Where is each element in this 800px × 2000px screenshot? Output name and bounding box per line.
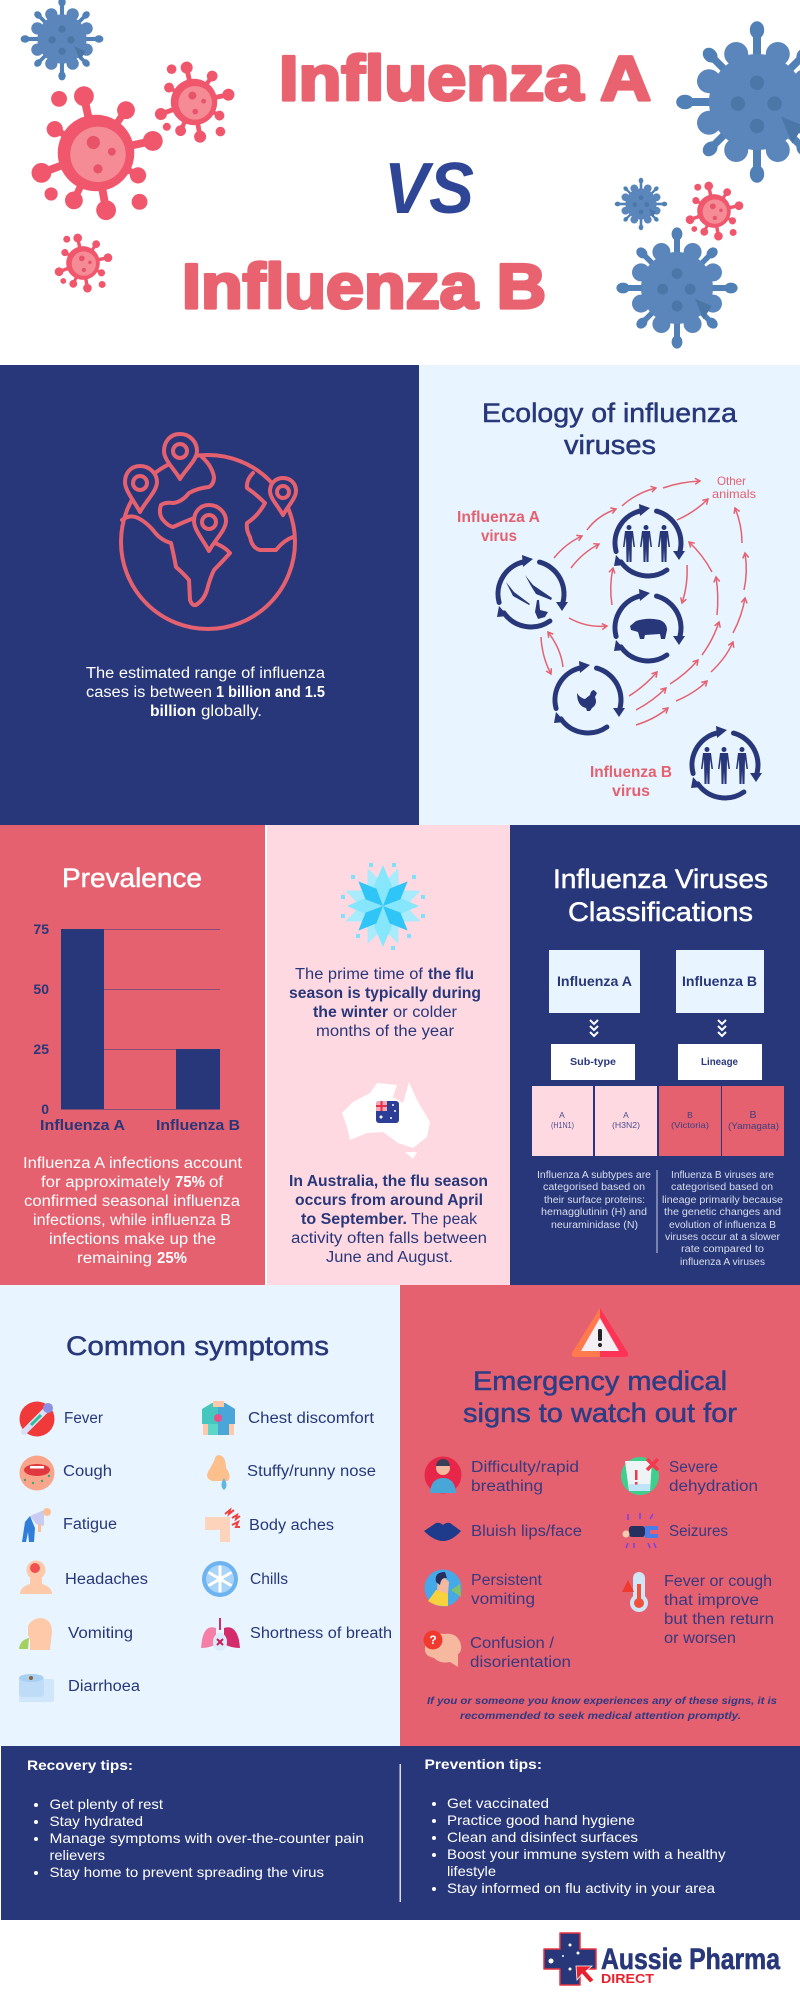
- heading: emergency: Emergency medical: [473, 1366, 727, 1396]
- sign: confusion: [424, 1630, 571, 1671]
- symptom: chest discomfort: Chest discomfort: [248, 1410, 375, 1427]
- icon: chicken cycle: [554, 661, 625, 733]
- cell: B Victoria: B: [687, 1110, 693, 1120]
- bar chart: 50: [33, 981, 49, 997]
- virus: small red right: [684, 181, 744, 241]
- text: prevention tips: Practice good hand hygiene: [447, 1812, 635, 1828]
- text: australia season: [289, 1173, 488, 1266]
- bar chart: 75: [33, 921, 49, 937]
- text: influenza B lineage: evolution of influenza B: [669, 1220, 776, 1231]
- label: influenza A virus: Influenza A: [457, 509, 540, 526]
- header: [0, 0, 800, 365]
- text: prevention tips: Prevention tips:: [424, 1756, 542, 1772]
- text: influenza B lineage: influenza A viruses: [680, 1257, 765, 1268]
- icon: snowflake: [341, 863, 425, 950]
- text: australia season: In Australia, the flu season: [289, 1173, 488, 1190]
- symptom: fever: [20, 1402, 103, 1436]
- logo: Aussie Pharma Direct: DIRECT: [601, 1971, 654, 1986]
- symptom: fatigue: Fatigue: [63, 1516, 117, 1533]
- heading: ecology: [482, 398, 738, 460]
- virus: red top: [153, 60, 236, 144]
- cell: A H3N2: [595, 1086, 657, 1156]
- virus: large blue right: [676, 21, 800, 183]
- symptom: fever: Fever: [64, 1410, 103, 1427]
- symptom: diarrhoea: Diarrhoea: [68, 1678, 140, 1695]
- label: influenza B virus: Influenza B: [590, 764, 672, 781]
- cell: B Yamagata: (Yamagata): [728, 1121, 779, 1131]
- text: influenza B lineage: viruses occur at a slower: [665, 1232, 781, 1243]
- arrows: transmission paths: [541, 481, 746, 725]
- text: prevention tips: Stay informed on flu activity in your area: [447, 1880, 715, 1896]
- panel: tips: [1, 1746, 800, 1920]
- sign: confusion: ?: [429, 1633, 437, 1647]
- label: influenza B virus: [590, 764, 672, 800]
- text: prevention tips: lifestyle: [447, 1863, 496, 1879]
- heading: emergency: [463, 1366, 737, 1428]
- symptom: fatigue: [22, 1508, 117, 1542]
- text: influenza B lineage: the genetic changes and: [664, 1207, 781, 1218]
- text: estimated range: cases is between: [86, 684, 212, 701]
- text: prevalence description: for approximately: [41, 1174, 170, 1191]
- title: Influenza B: Influenza B: [182, 252, 546, 322]
- heading: common symptoms: Common symptoms: [66, 1331, 329, 1361]
- text: prime time: [289, 966, 481, 1040]
- box: influenza B: [676, 950, 764, 1013]
- symptom: headaches: Headaches: [65, 1571, 148, 1588]
- sign: difficulty breathing: [424, 1456, 579, 1495]
- logo: Aussie Pharma Direct: [544, 1933, 780, 1986]
- sign: returning fever: [622, 1572, 774, 1647]
- text: influenza B lineage: categorised based on: [671, 1182, 773, 1193]
- text: seek medical attention: If you or someone you know experiences any of these signs, it is: [427, 1695, 777, 1707]
- sign: confusion: Confusion /: [470, 1635, 555, 1652]
- symptom: cough: Cough: [63, 1463, 112, 1480]
- sign: returning fever: that improve: [664, 1592, 759, 1609]
- text: estimated range: [86, 665, 325, 720]
- text: prime time: the flu: [428, 966, 474, 983]
- sign: returning fever: but then return: [664, 1611, 774, 1628]
- panel: classifications: [510, 825, 800, 1285]
- sign: seizures: Seizures: [669, 1523, 728, 1540]
- cell: A H3N2: (H3N2): [612, 1120, 640, 1130]
- panel: flu season: [267, 825, 510, 1285]
- text: australia season: June and August.: [326, 1249, 453, 1266]
- panel: emergency signs: [400, 1285, 800, 1746]
- sign: difficulty breathing: breathing: [471, 1478, 543, 1495]
- text: seek medical attention: [427, 1695, 777, 1722]
- bar chart: Influenza B: [156, 1118, 240, 1134]
- symptom: stuffy nose: [207, 1455, 376, 1490]
- text: recovery tips: Recovery tips:: [27, 1757, 133, 1773]
- text: prevalence description: Influenza A infections account: [23, 1155, 243, 1172]
- sign: confusion: disorientation: [470, 1654, 571, 1671]
- text: prime time: or colder: [393, 1004, 457, 1021]
- icon: humans cycle: [614, 504, 685, 576]
- heading: prevalence: Prevalence: [62, 863, 202, 893]
- virus: blue top left: [21, 0, 103, 80]
- text: prevention tips: Boost your immune system with a healthy: [447, 1846, 726, 1862]
- text: prevalence description: 75%: [175, 1174, 205, 1191]
- bar chart: 25: [33, 1041, 49, 1057]
- text: prevalence description: 25%: [157, 1250, 187, 1267]
- virus: red lower left: [53, 233, 113, 293]
- text: estimated range: globally.: [201, 703, 262, 720]
- text: estimated range: billion: [150, 703, 196, 720]
- icon: australia map with flag: [342, 1082, 430, 1159]
- panel: common symptoms: [0, 1285, 400, 1746]
- heading: classifications: [553, 864, 768, 927]
- icon: chevrons A: [590, 1020, 598, 1036]
- text: influenza A subtypes: neuraminidase (N): [551, 1220, 638, 1231]
- symptom: chills: [202, 1561, 288, 1597]
- label: other animals: [712, 474, 756, 501]
- icon: warning triangle: [572, 1308, 628, 1357]
- text: australia season: occurs from around April: [295, 1192, 483, 1209]
- text: influenza A subtypes: hemagglutinin (H) and: [541, 1207, 647, 1218]
- panel: prevalence: [0, 825, 265, 1285]
- symptom: diarrhoea: [19, 1674, 140, 1702]
- symptom: chills: Chills: [250, 1571, 288, 1588]
- text: prime time: The prime time of: [295, 966, 424, 983]
- text: australia season: activity often falls between: [291, 1230, 487, 1247]
- symptom: shortness of breath: [201, 1618, 392, 1651]
- sign: persistent vomiting: vomiting: [471, 1591, 535, 1608]
- panel: ecology of influenza viruses: [419, 365, 800, 825]
- heading: classifications: Classifications: [568, 897, 753, 927]
- text: influenza A subtypes: [537, 1170, 651, 1231]
- symptom: stuffy nose: Stuffy/runny nose: [247, 1463, 376, 1480]
- sign: severe dehydration: [621, 1457, 758, 1495]
- icon: influenza B humans cycle: [691, 726, 762, 798]
- bar: influenza A: [61, 929, 104, 1109]
- virus: small blue: [615, 178, 667, 230]
- label: other animals: Other: [717, 474, 746, 488]
- icon: birds cycle: [497, 555, 568, 627]
- box: influenza A: [549, 950, 640, 1013]
- sign: severe dehydration: Severe: [669, 1459, 718, 1476]
- text: prime time: season is typically during: [289, 985, 481, 1002]
- text: seek medical attention: recommended to seek medical attention promptly.: [460, 1710, 741, 1722]
- text: influenza A subtypes: their surface proteins:: [544, 1195, 645, 1206]
- heading: ecology: Ecology of influenza: [482, 398, 738, 428]
- text: recovery tips: Stay hydrated: [50, 1813, 143, 1829]
- box: sub-type: [551, 1044, 635, 1080]
- text: prime time: months of the year: [316, 1023, 454, 1040]
- text: prime time: the winter: [313, 1004, 388, 1021]
- bar chart: [33, 921, 240, 1134]
- text: influenza B lineage: [662, 1170, 783, 1268]
- text: recovery tips: Get plenty of rest: [50, 1796, 163, 1812]
- symptom: vomiting: Vomiting: [68, 1625, 133, 1642]
- sign: persistent vomiting: [424, 1570, 543, 1608]
- cell: A H1N1: [532, 1086, 593, 1156]
- text: prevalence description: of: [209, 1174, 224, 1191]
- heading: ecology: viruses: [564, 430, 656, 460]
- bar chart: Influenza A: [40, 1118, 126, 1134]
- sign: seizures: [622, 1513, 728, 1548]
- text: prevalence description: [23, 1155, 243, 1267]
- label: influenza A virus: virus: [481, 528, 517, 545]
- box: influenza A: Influenza A: [557, 973, 632, 989]
- bar: influenza B: [176, 1049, 220, 1109]
- text: australia season: to September.: [301, 1211, 407, 1228]
- text: recovery tips: Stay home to prevent spreading the virus: [50, 1864, 324, 1880]
- text: recovery tips: relievers: [50, 1847, 105, 1863]
- sign: bluish lips: [424, 1523, 582, 1541]
- sign: returning fever: Fever or cough: [664, 1573, 772, 1590]
- symptom: chest discomfort: [202, 1401, 375, 1435]
- virus: medium blue: [616, 227, 738, 349]
- sign: returning fever: or worsen: [664, 1630, 736, 1647]
- symptom: vomiting: [19, 1618, 133, 1650]
- symptom: shortness of breath: Shortness of breath: [250, 1625, 392, 1642]
- cell: A H1N1: (H1N1): [551, 1120, 574, 1130]
- cell: B Yamagata: [722, 1086, 784, 1156]
- text: recovery tips: Manage symptoms with over-the-counter pain: [50, 1830, 364, 1846]
- symptom: body aches: Body aches: [249, 1517, 334, 1534]
- text: prevention tips: [424, 1756, 726, 1896]
- box: sub-type: Sub-type: [570, 1056, 616, 1068]
- bar chart: 0: [41, 1101, 49, 1117]
- label: other animals: animals: [712, 487, 756, 501]
- symptom: cough: [20, 1456, 112, 1490]
- title: Influenza A: Influenza A: [279, 44, 651, 114]
- text: prevalence description: remaining: [77, 1250, 152, 1267]
- text: influenza B lineage: lineage primarily because: [662, 1195, 783, 1206]
- text: influenza A subtypes: categorised based on: [543, 1182, 645, 1193]
- text: prevalence description: infections, while influenza B: [33, 1212, 231, 1229]
- sign: persistent vomiting: Persistent: [471, 1572, 543, 1589]
- text: prevention tips: Get vaccinated: [447, 1795, 549, 1811]
- text: prevalence description: confirmed seasonal influenza: [24, 1193, 240, 1210]
- sign: severe dehydration: dehydration: [669, 1478, 758, 1495]
- panel: global cases: [0, 365, 419, 825]
- icon: pig cycle: [614, 589, 685, 661]
- symptom: headaches: [20, 1560, 148, 1594]
- text: estimated range: 1 billion and 1.5: [216, 684, 325, 701]
- sign: difficulty breathing: Difficulty/rapid: [471, 1459, 579, 1476]
- text: influenza B lineage: rate compared to: [681, 1244, 764, 1255]
- text: australia season: The peak: [411, 1211, 477, 1228]
- cell: B Victoria: [659, 1086, 721, 1156]
- virus: large red: [29, 84, 165, 222]
- text: recovery tips: [27, 1757, 364, 1880]
- text: influenza B lineage: Influenza B viruses are: [671, 1170, 774, 1181]
- box: lineage: [678, 1044, 762, 1080]
- label: influenza A virus: [457, 509, 540, 545]
- cell: B Yamagata: B: [749, 1109, 757, 1121]
- box: influenza B: Influenza B: [682, 973, 757, 989]
- sign: bluish lips: Bluish lips/face: [471, 1523, 582, 1540]
- text: estimated range: The estimated range of influenza: [86, 665, 325, 682]
- text: prevalence description: infections make up the: [49, 1231, 216, 1248]
- icon: chevrons B: [718, 1020, 726, 1036]
- label: influenza B virus: virus: [612, 783, 650, 800]
- heading: classifications: Influenza Viruses: [553, 864, 768, 894]
- cell: B Victoria: (Victoria): [671, 1120, 709, 1130]
- text: influenza A subtypes: Influenza A subtypes are: [537, 1170, 651, 1181]
- text: prevention tips: Clean and disinfect surfaces: [447, 1829, 638, 1845]
- cell: A H3N2: A: [623, 1110, 629, 1120]
- box: lineage: Lineage: [701, 1056, 738, 1068]
- cell: A H1N1: A: [559, 1110, 565, 1120]
- title: VS: VS: [384, 149, 474, 229]
- symptom: body aches: [205, 1510, 334, 1542]
- heading: emergency: signs to watch out for: [463, 1398, 737, 1428]
- icon: globe with pins: [121, 434, 296, 629]
